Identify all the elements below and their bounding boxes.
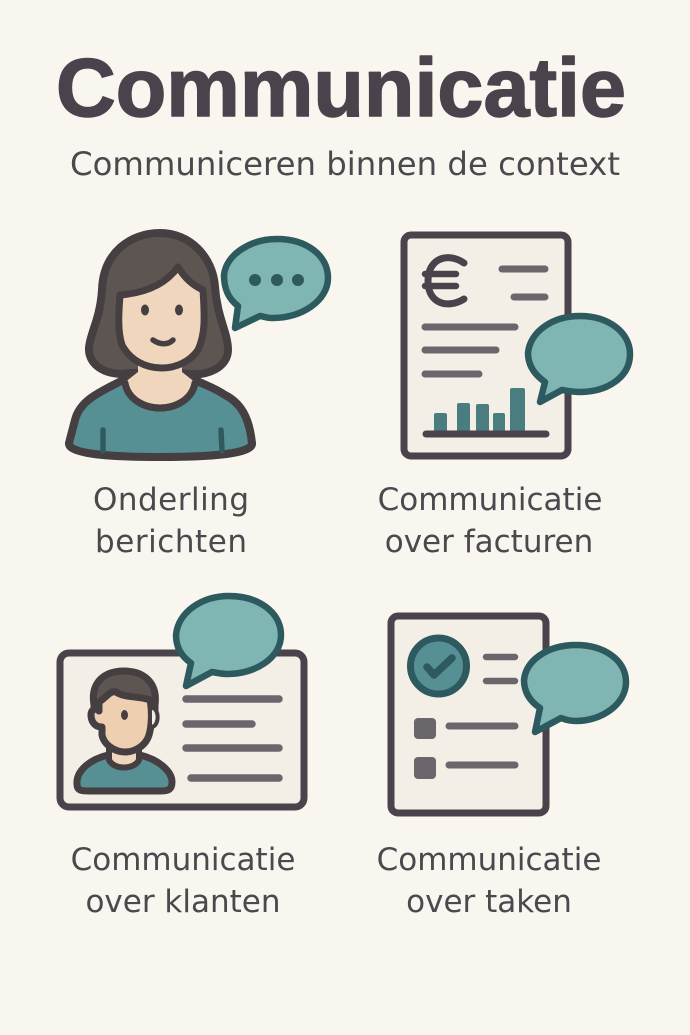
icon: woman with speech bubble: [69, 233, 328, 457]
icon: task list with speech bubble: [391, 616, 626, 813]
icon: invoice with speech bubble: [404, 235, 630, 456]
panel: communicatie over taken: [377, 616, 626, 920]
panel: onderling berichten: [69, 233, 328, 560]
label: Communicatie: [377, 842, 601, 878]
label: Communicatie: [378, 482, 602, 518]
icon: customer card with speech bubble: [60, 596, 304, 807]
panel: communicatie over klanten: [60, 596, 304, 920]
label: over facturen: [385, 524, 593, 560]
title: Communicatie: [56, 41, 626, 134]
label: berichten: [95, 524, 247, 560]
panel: communicatie over facturen: [378, 235, 630, 560]
label: over taken: [406, 884, 572, 920]
subtitle: Communiceren binnen de context: [70, 145, 620, 183]
label: over klanten: [85, 884, 281, 920]
label: Communicatie: [71, 842, 295, 878]
label: Onderling: [93, 482, 249, 518]
